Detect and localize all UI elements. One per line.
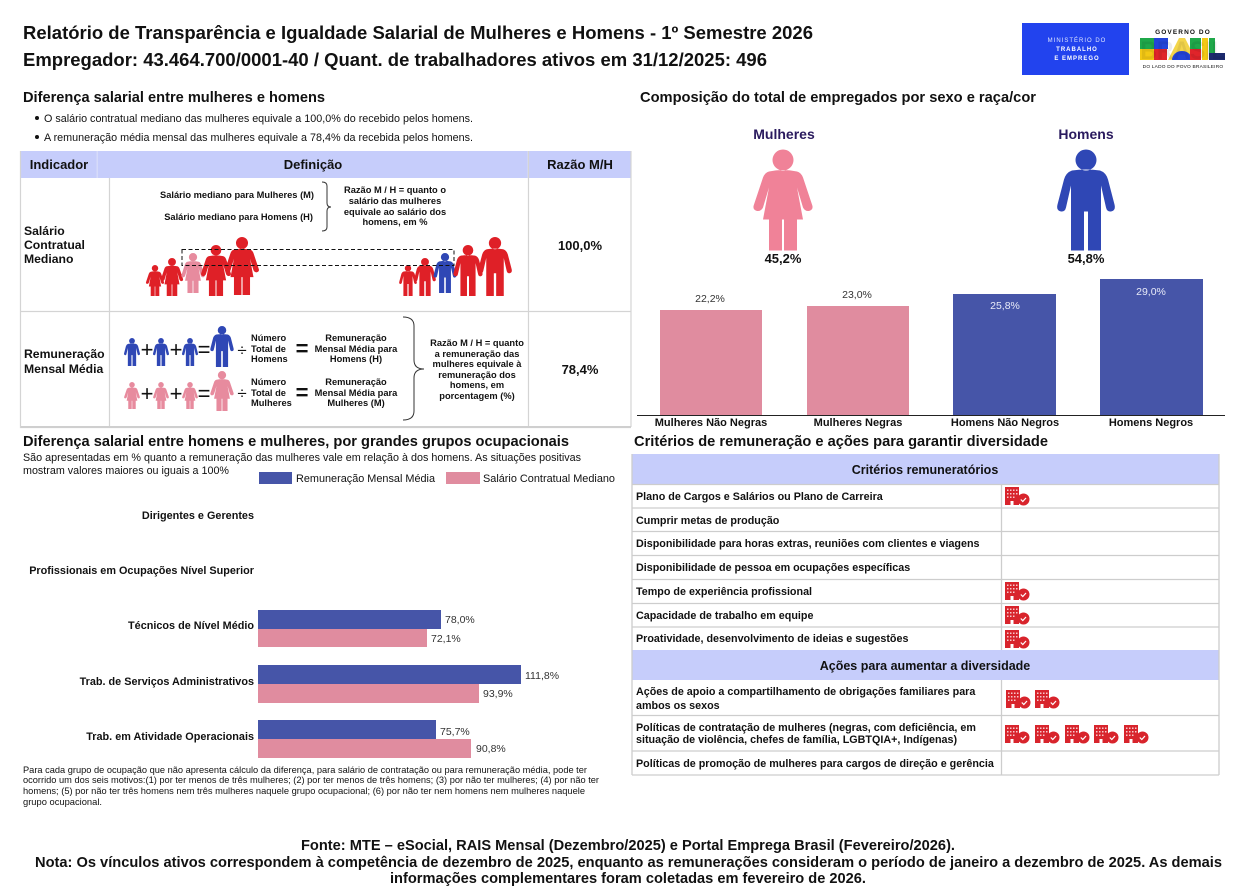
figure: mulheres 45,2%: 45,2% [765, 251, 802, 266]
row: remuneração mensal média: Remuneração [24, 347, 105, 361]
bullet text: A remuneração média mensal das mulheres equivale a 78,4% da recebida pelos homens. [44, 132, 473, 144]
row: contratação: situação de violência, chefes de família, LGBTQIA+, Indígenas) [636, 734, 958, 746]
formula: women: Mulheres [251, 398, 292, 408]
row: salário contratual mediano: Salário [24, 224, 65, 238]
row: remuneração mensal média: mulheres equivale à [433, 359, 522, 369]
logo: Governo do Brasil: DO LADO DO POVO BRASILEIRO [1143, 64, 1223, 70]
bar chart: grupos ocupacionais [29, 510, 559, 758]
text block: explicação: São apresentadas em % quanto a remuneração das mulheres vale em relação à dos homens. As situações positivas [23, 452, 582, 464]
formula: women [124, 371, 398, 411]
logo: Ministério do Trabalho e Emprego: E EMPREGO [1054, 56, 1100, 62]
footer source note: informações complementares foram coletadas em fevereiro de 2026. [390, 870, 866, 887]
footer source note: Nota: Os vínculos ativos correspondem à competência de dezembro de 2025, enquanto as remunerações consideram o período de janeiro a dezembro de 2025. As demais [35, 854, 1222, 871]
figure: mulheres 45,2%: Mulheres [753, 126, 815, 142]
row: equipe: Capacidade de trabalho em equipe [636, 610, 813, 622]
heading: composição: Composição do total de empregados por sexo e raça/cor [640, 89, 1036, 106]
formula: men: + [141, 337, 153, 362]
group: Trab. de Serviços Administrativos: Trab. de Serviços Administrativos [80, 676, 254, 688]
legend [259, 472, 615, 485]
formula: women: + [141, 381, 153, 406]
footnote: grupo ocupacional. [23, 797, 102, 807]
logo: Ministério do Trabalho e Emprego: TRABALHO [1056, 47, 1098, 53]
title: Relatório de Transparência e Igualdade Salarial de Mulheres e Homens - 1º Semestre 2026 [23, 23, 813, 43]
bar: Homens Negros: 29,0% [1136, 286, 1166, 298]
row: apoio: Ações de apoio a compartilhamento de obrigações familiares para [636, 686, 976, 698]
formula: women: Total de [251, 388, 286, 398]
group: Técnicos de Nível Médio: Técnicos de Nível Médio [128, 620, 254, 632]
row: proatividade: Proatividade, desenvolvimento de ideias e sugestões [636, 633, 908, 645]
formula: men: ÷ [237, 341, 247, 360]
bar: Mulheres Não Negras [655, 293, 767, 429]
group: Trab. em Atividade Operacionais [86, 720, 506, 758]
bullet text [35, 113, 473, 144]
group: Trab. de Serviços Administrativos [80, 665, 559, 703]
text block: explicação: mostram valores maiores ou iguais a 100% [23, 465, 229, 477]
group: Trab. em Atividade Operacionais: Trab. em Atividade Operacionais [86, 731, 254, 743]
bar: Mulheres Não Negras: 22,2% [695, 293, 725, 305]
row: salário contratual mediano: equivale ao salário dos [344, 207, 446, 217]
row: experiência: Tempo de experiência profissional [636, 586, 812, 598]
row: salário contratual mediano: Contratual [24, 238, 85, 252]
header: critérios remuneratórios: Critérios remuneratórios [852, 463, 998, 477]
bar: Homens Não Negros: 25,8% [990, 300, 1020, 312]
bar: Homens Não Negros: Homens Não Negros [951, 417, 1059, 429]
footnote: Para cada grupo de ocupação que não apresenta cálculo da diferença, para salário de contratação ou para remuneração média, pode ter [23, 765, 587, 775]
logo: Ministério do Trabalho e Emprego: MINISTÉRIO DO [1048, 37, 1106, 44]
row: contratação [636, 722, 1148, 746]
table header: Definição [284, 157, 342, 172]
table header [21, 151, 631, 178]
row: ocupações específicas: Disponibilidade de pessoa em ocupações específicas [636, 562, 910, 574]
heading: diferença salarial: Diferença salarial entre mulheres e homens [23, 89, 325, 106]
group: Técnicos de Nível Médio: 78,0% [445, 614, 475, 626]
bar: Homens Negros [1100, 279, 1203, 429]
panel: critérios e ações table [632, 454, 1219, 775]
formula: men: Remuneração [325, 333, 387, 343]
figure: mulheres 45,2% [753, 126, 815, 266]
formula: women: = [198, 381, 210, 406]
group: Técnicos de Nível Médio [128, 610, 475, 647]
text block: explicação [23, 452, 582, 477]
bullet text: O salário contratual mediano das mulheres equivale a 100,0% do recebido pelos homens. [44, 113, 473, 125]
formula: women: + [170, 381, 182, 406]
logo: Ministério do Trabalho e Emprego [1022, 23, 1129, 75]
formula: men: Total de [251, 344, 286, 354]
row: horas extras: Disponibilidade para horas extras, reuniões com clientes e viagens [636, 538, 980, 550]
heading: grandes grupos ocupacionais: Diferença salarial entre homens e mulheres, por grandes grupos ocupacionais [23, 433, 569, 450]
formula: men: + [170, 337, 182, 362]
bar: Homens Não Negros [951, 294, 1059, 429]
footnote: homens; (5) por não ter três homens nem três mulheres naquele grupo ocupacional; (6) por não ter nem homens nem mulheres naquele [23, 786, 585, 796]
row: experiência [636, 582, 1030, 600]
footnote: ocorrido um dos seis motivos:(1) por ter menos de três mulheres; (2) por ter menos de três homens; (3) por não ter mulheres; (4) por não ter [23, 775, 599, 785]
row: salário contratual mediano: Salário mediano para Homens (H) [164, 212, 313, 222]
bar: Mulheres Negras: Mulheres Negras [814, 417, 902, 429]
legend: Remuneração Mensal Média [296, 473, 436, 485]
header: critérios remuneratórios [632, 454, 1219, 484]
bar: Mulheres Negras: 23,0% [842, 289, 872, 301]
group: Dirigentes e Gerentes: Dirigentes e Gerentes [142, 510, 254, 522]
legend: Salário Contratual Mediano [483, 473, 615, 485]
row: apoio: ambos os sexos [636, 700, 720, 712]
formula: women: ÷ [237, 384, 247, 403]
formula: women: = [296, 380, 308, 405]
group: Trab. em Atividade Operacionais: 90,8% [476, 743, 506, 755]
row: salário contratual mediano: salário das mulheres [349, 196, 441, 206]
logo: Governo do Brasil: GOVERNO DO [1155, 29, 1211, 36]
row: remuneração mensal média: a remuneração das [435, 349, 519, 359]
bar: Mulheres Negras [807, 289, 909, 429]
header: ações [632, 650, 1219, 680]
figure: homens 54,8%: Homens [1058, 126, 1114, 142]
formula: men: Homens [251, 354, 288, 364]
row: remuneração mensal média: Razão M / H = quanto [430, 338, 524, 348]
group: Trab. de Serviços Administrativos: 111,8% [525, 670, 559, 682]
header: ações: Ações para aumentar a diversidade [820, 659, 1030, 673]
formula: men: Mensal Média para [315, 344, 398, 354]
formula: men: Homens (H) [330, 354, 382, 364]
row: remuneração mensal média: porcentagem (%) [439, 391, 515, 401]
table header: Indicador [30, 157, 88, 172]
group: Trab. de Serviços Administrativos: 93,9% [483, 688, 513, 700]
row: salário contratual mediano: Salário mediano para Mulheres (M) [160, 190, 314, 200]
row: remuneração mensal média [24, 317, 599, 420]
row: plano de cargos [636, 487, 1030, 506]
formula: women: Remuneração [325, 377, 387, 387]
row: promoção: Políticas de promoção de mulheres para cargos de direção e gerência [636, 758, 995, 770]
title [23, 23, 813, 70]
row: remuneração mensal média: homens, em [450, 380, 504, 390]
panel: indicator table [20, 151, 631, 428]
formula: women: Mensal Média para [315, 388, 398, 398]
row: salário contratual mediano: Mediano [24, 252, 73, 266]
icon group: men by salary [399, 237, 512, 296]
table header: Razão M/H [547, 157, 613, 172]
row: salário contratual mediano [24, 182, 602, 296]
group: Trab. em Atividade Operacionais: 75,7% [440, 726, 470, 738]
row: salário contratual mediano: homens, em % [362, 217, 428, 227]
row: remuneração mensal média: Mensal Média [24, 362, 103, 376]
figure: homens 54,8% [1057, 126, 1115, 266]
icon group: women by salary [146, 237, 259, 296]
group: Profissionais: Profissionais em Ocupações Nível Superior [29, 565, 255, 577]
footer source note [35, 837, 1222, 887]
bar: Homens Negros: Homens Negros [1109, 417, 1193, 429]
formula: women: Mulheres (M) [327, 398, 385, 408]
logo: Governo do Brasil [1140, 29, 1226, 70]
formula: women: Número [251, 377, 286, 387]
row: remuneração mensal média: remuneração dos [438, 370, 516, 380]
footnote [23, 765, 599, 807]
title: Empregador: 43.464.700/0001-40 / Quant. de trabalhadores ativos em 31/12/2025: 496 [23, 50, 767, 70]
formula: men: Número [251, 333, 286, 343]
group: Técnicos de Nível Médio: 72,1% [431, 633, 461, 645]
bar chart: composição por raça/cor [637, 279, 1225, 429]
logo: Governo do Brasil: BRASIL [1140, 37, 1226, 65]
formula: men: = [296, 336, 308, 361]
row: salário contratual mediano: Razão M / H = quanto o [344, 185, 446, 195]
bar: Mulheres Não Negras: Mulheres Não Negras [655, 417, 767, 429]
row: metas: Cumprir metas de produção [636, 515, 780, 527]
row: equipe [636, 606, 1030, 624]
row: plano de cargos: Plano de Cargos e Salários ou Plano de Carreira [636, 491, 884, 503]
heading: critérios: Critérios de remuneração e ações para garantir diversidade [634, 433, 1048, 450]
row: apoio [636, 686, 1060, 712]
row: contratação: Políticas de contratação de mulheres (negras, com deficiência, em [636, 722, 976, 734]
figure: homens 54,8%: 54,8% [1068, 251, 1105, 266]
formula: men: = [198, 337, 210, 362]
row: proatividade [636, 630, 1030, 648]
formula: men [124, 326, 398, 367]
row: remuneração mensal média: 78,4% [562, 362, 599, 377]
footer source note: Fonte: MTE – eSocial, RAIS Mensal (Dezembro/2025) e Portal Emprega Brasil (Fevereiro/2026). [301, 837, 955, 854]
row: salário contratual mediano: 100,0% [558, 238, 602, 253]
